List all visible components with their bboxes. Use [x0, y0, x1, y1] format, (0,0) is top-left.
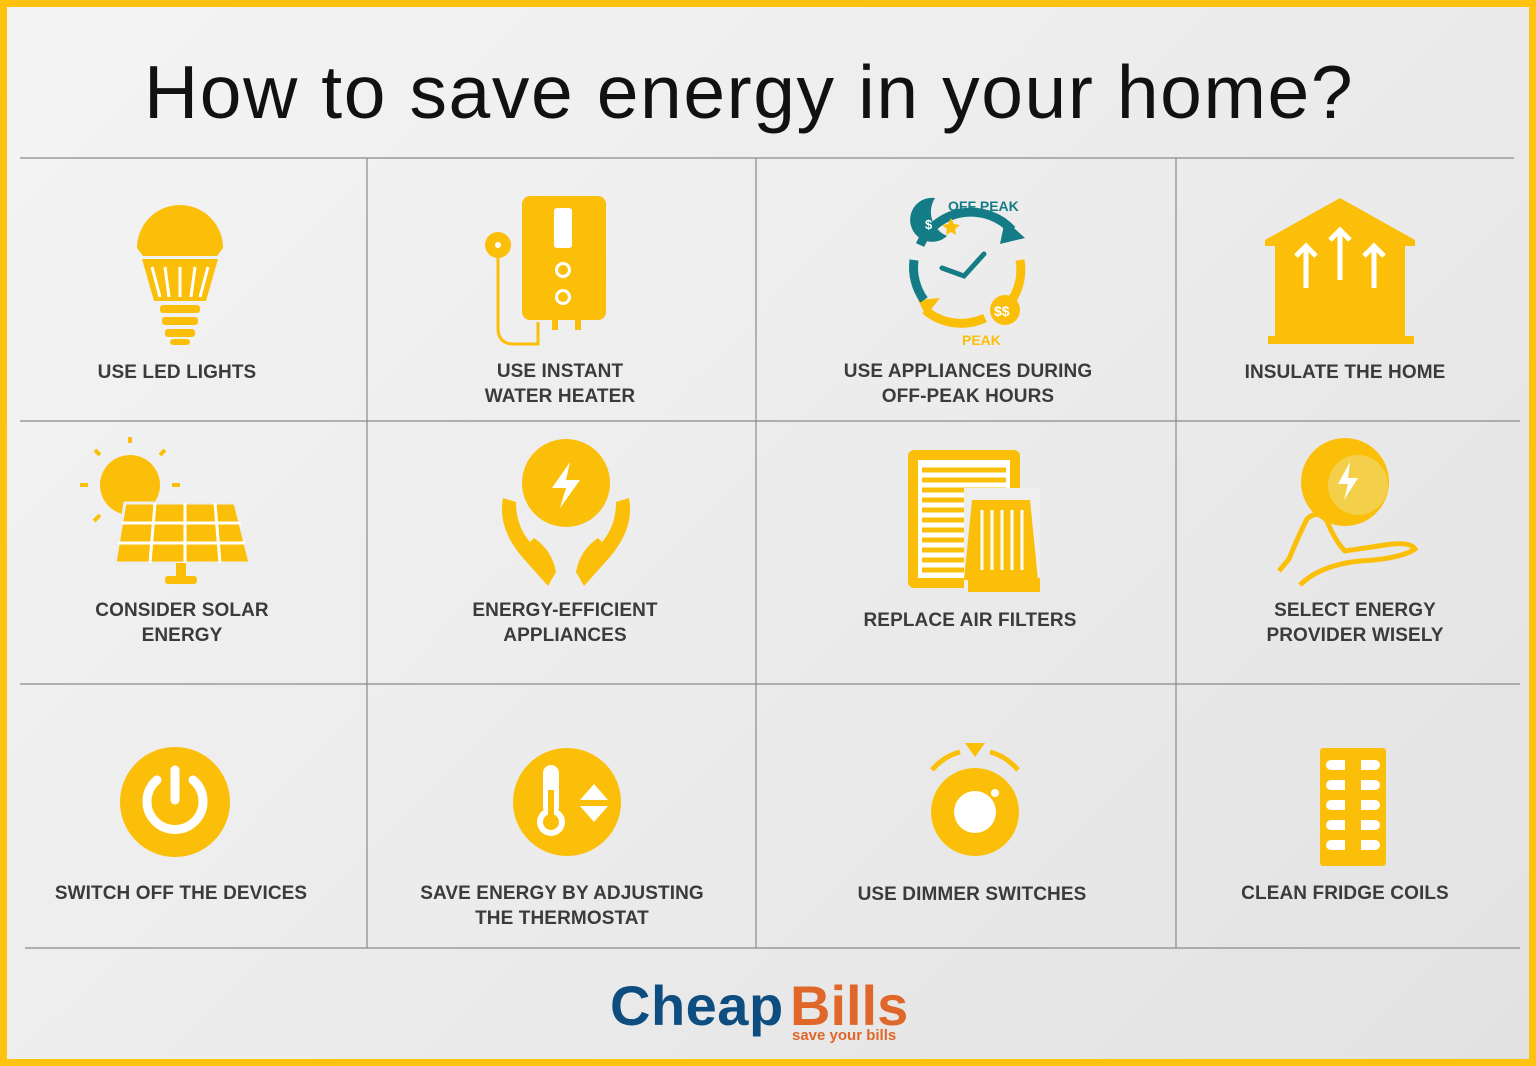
icon: thermostat	[513, 748, 621, 856]
icon: power	[120, 747, 230, 857]
label: fridge: CLEAN FRIDGE COILS	[1241, 883, 1449, 904]
label: provider: PROVIDER WISELY	[1266, 625, 1444, 646]
label: off-peak: USE APPLIANCES DURING	[844, 361, 1092, 382]
logo: Bills	[790, 974, 908, 1037]
label: switch off: SWITCH OFF THE DEVICES	[55, 883, 307, 904]
icon: energy hands	[502, 439, 630, 586]
label: efficient appliances: APPLIANCES	[503, 625, 627, 646]
icon: air filters	[908, 450, 1040, 592]
logo: save your bills	[792, 1027, 896, 1044]
icon: off-peak clock: OFF PEAK	[948, 198, 1019, 214]
label: solar: CONSIDER SOLAR	[95, 600, 269, 621]
icon: solar	[80, 437, 250, 584]
icon: select provider	[1279, 438, 1415, 585]
label: provider: SELECT ENERGY	[1274, 600, 1436, 621]
icon: off-peak clock: $	[925, 217, 933, 232]
icon: water heater	[485, 196, 606, 344]
label: dimmer: USE DIMMER SWITCHES	[858, 884, 1086, 905]
label: water heater: USE INSTANT	[497, 361, 623, 382]
label: thermostat: THE THERMOSTAT	[475, 908, 649, 929]
label: solar: ENERGY	[142, 625, 222, 646]
icon: LED bulb	[137, 205, 223, 345]
label: efficient appliances	[472, 600, 658, 646]
icon: off-peak clock: PEAK	[962, 332, 1001, 348]
icon: off-peak clock	[910, 198, 1025, 348]
label: efficient appliances: ENERGY-EFFICIENT	[472, 600, 658, 621]
label: water heater: WATER HEATER	[485, 386, 635, 407]
title: How to save energy in your home?	[144, 50, 1354, 134]
label: solar	[95, 600, 269, 646]
logo	[610, 974, 908, 1044]
label: water heater	[484, 361, 635, 407]
icon: insulated house	[1265, 198, 1415, 344]
label: LED: USE LED LIGHTS	[98, 362, 256, 383]
icon: off-peak clock: $$	[994, 303, 1010, 319]
label: thermostat	[420, 883, 704, 929]
icon: fridge coils	[1320, 748, 1386, 866]
label: thermostat: SAVE ENERGY BY ADJUSTING	[420, 883, 704, 904]
logo: Cheap	[610, 974, 784, 1037]
label: off-peak: OFF-PEAK HOURS	[882, 386, 1054, 407]
label: off-peak	[844, 361, 1092, 407]
label: air filters: REPLACE AIR FILTERS	[863, 610, 1076, 631]
icon: dimmer	[931, 743, 1019, 856]
label: provider	[1266, 600, 1444, 646]
label: insulate: INSULATE THE HOME	[1245, 362, 1445, 383]
